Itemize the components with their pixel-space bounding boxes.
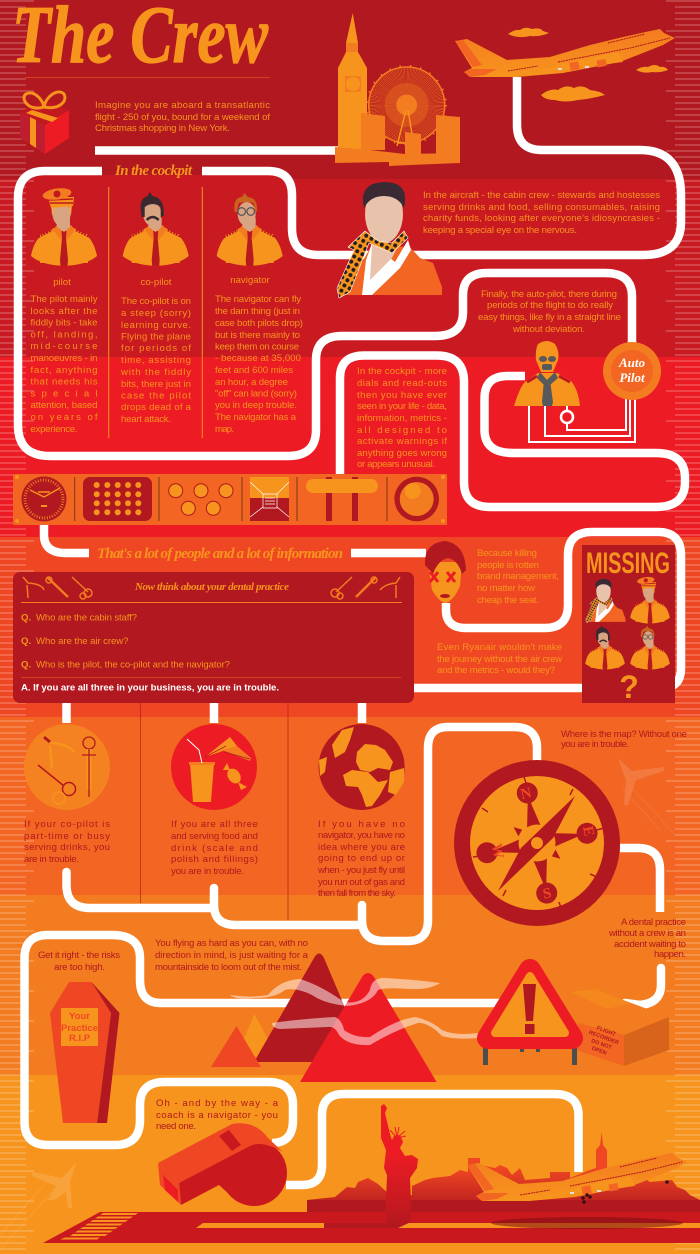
text: pilot: special (30, 388, 98, 399)
text: pilot: experience. (30, 424, 78, 435)
text: co-pilot: drops dead of a (121, 402, 192, 413)
icon: coffin: Practice (61, 1023, 98, 1034)
crew labels: pilot (53, 277, 71, 288)
text: co-pilot: case the pilot (121, 390, 191, 402)
badge: auto pilot (603, 342, 661, 400)
icon: food and drink circle (171, 724, 257, 810)
text: where is the map (561, 729, 687, 750)
icon: gift (20, 92, 69, 154)
round lamps (169, 484, 233, 515)
intro text: flight - 250 of you, bound for a weekend of (95, 112, 270, 123)
text: killing people: people is rotten (477, 560, 539, 571)
icon: compass (454, 760, 620, 926)
question 3: Who is the pilot, the co-pilot and the navigator? (36, 660, 230, 671)
heading: in the cockpit: In the cockpit (114, 163, 193, 179)
text: pilot: on years of (30, 412, 98, 423)
text: where is the map: you are in trouble. (561, 739, 629, 750)
ferris wheel (367, 66, 446, 146)
icon: compass: S (542, 885, 553, 903)
text: co-pilot: learning curve. (121, 320, 191, 331)
question 2: Q. (21, 636, 31, 647)
icon: compass: N (519, 785, 533, 803)
text: pilot: attention, based (30, 400, 98, 411)
text: accident waiting: A dental practice (621, 917, 686, 928)
dental tools right (331, 577, 400, 599)
text: navigator: an hour, a degree (215, 377, 288, 388)
text: navigator (215, 294, 303, 435)
text: pilot: mid-course (30, 341, 98, 352)
icon: coffin: R.I.P (69, 1033, 91, 1044)
text: cabin crew: keeping a special eye on the nervous. (423, 225, 577, 236)
crew labels: navigator (230, 275, 271, 286)
text: cockpit dials: anything goes wrong (357, 448, 447, 459)
icon: coffin (50, 982, 120, 1123)
question 2: Who are the air crew? (36, 636, 128, 647)
text: co-pilot: for periods of (121, 343, 191, 354)
text: navigator: The navigator can fly (215, 294, 301, 305)
text: cockpit dials: In the cockpit - more (357, 366, 447, 377)
intro text: Christmas shopping in New York. (95, 123, 230, 134)
landing gear (581, 1180, 669, 1204)
text: pilot: fiddly bits - take (30, 318, 98, 329)
circuit lines (529, 398, 635, 442)
mist (230, 978, 440, 1006)
icon: whistle (158, 1123, 287, 1206)
text: killing people: cheap the seat. (477, 595, 539, 606)
text: navigator: feet and 600 miles (215, 365, 293, 376)
text: no co-pilot: serving drinks, you (24, 842, 110, 853)
text: ryanair: the journey without the air crew (437, 654, 562, 665)
text: navigator: The navigator has a (215, 412, 297, 423)
text: no navigator: then fall from the sky. (318, 888, 396, 899)
text: cabin crew: In the aircraft - the cabin crew - stewards and hostesses (423, 190, 660, 201)
circuit node (561, 411, 573, 423)
question mark: ? (619, 669, 639, 705)
text: all three: and serving food and (171, 831, 258, 842)
runway (43, 1212, 700, 1243)
text: pilot: off, landing, (30, 329, 98, 340)
text: cockpit dials: seen in your life - data, (357, 401, 447, 412)
text: all three: drink (scale and (171, 843, 258, 854)
text: navigator: "off" can land (sorry) (215, 388, 297, 400)
missing pilot (630, 576, 670, 624)
text: flying hard: You flying as hard as you can, with no (155, 938, 308, 949)
text: navigator: you in deep trouble. (215, 400, 297, 411)
question 1: Who are the cabin staff? (36, 613, 137, 624)
text: all three: If you are all three (171, 819, 258, 830)
text: coach: coach is a navigator - you (156, 1110, 278, 1121)
text: cockpit dials: activate warnings if (357, 436, 447, 447)
icon: warning sign (483, 970, 577, 1065)
badge: auto pilot: Pilot (619, 370, 645, 385)
text: navigator: keep them on course (215, 342, 299, 352)
text: co-pilot (120, 296, 192, 425)
text: no navigator: idea where you are (318, 842, 405, 853)
icon: flight recorder box: DO NOT (590, 1038, 613, 1051)
crew labels: co-pilot (141, 277, 172, 288)
illustration: London skyline (335, 13, 460, 166)
text: no co-pilot: are in trouble. (24, 854, 79, 865)
text: coach: need one. (156, 1121, 196, 1132)
icon: dental tools circle (24, 724, 110, 810)
text: pilot (30, 294, 98, 435)
figure: auto-pilot dummy (514, 341, 580, 406)
text: cockpit dials (357, 366, 448, 470)
text: ryanair: and the metrics - would they? (437, 665, 555, 676)
text: flying hard: mountainside to loom out of the mist. (155, 962, 302, 973)
text: pilot: The pilot mainly (30, 294, 98, 305)
figure: co-pilot (123, 192, 189, 266)
icon: flight recorder box (565, 985, 669, 1066)
text: killing people: no matter how (477, 583, 535, 594)
column dividers (109, 187, 202, 438)
figure: cabin crew (337, 182, 442, 298)
text: cabin crew (423, 190, 660, 236)
text: auto-pilot: without deviation. (512, 324, 585, 335)
illustration: plane landing (467, 1153, 687, 1204)
gauge (22, 476, 66, 522)
text: cockpit dials: or appears unusual. (357, 459, 435, 470)
text: coach (156, 1098, 279, 1132)
text: get it right (38, 950, 120, 973)
question 3: Q. (21, 660, 31, 671)
text: all three: polish and fillings) (171, 854, 258, 865)
button grid (83, 477, 152, 521)
text: co-pilot: Flying the plane (121, 332, 191, 342)
round dial (394, 477, 439, 521)
text: coach: Oh - and by the way - a (156, 1098, 279, 1109)
text: no navigator: If you have no (318, 819, 405, 830)
text: cockpit dials: dials and read-outs (357, 378, 447, 389)
text: get it right: Get it right - the risks (38, 950, 120, 961)
badge: auto pilot: Auto (618, 355, 646, 370)
text: pilot: manoeuvres - in (30, 353, 98, 364)
figure: pilot (31, 187, 97, 266)
text: pilot: fact, anything (30, 365, 98, 376)
instrument panel (13, 474, 447, 525)
artificial horizon (250, 477, 289, 521)
figure: dead passenger face (425, 541, 466, 603)
text: cockpit dials: then you have ever (357, 390, 448, 401)
icon: compass: E (579, 825, 597, 838)
illustration: plane taking off (455, 29, 675, 77)
panel: missing poster (582, 545, 675, 705)
text: no navigator (317, 819, 406, 899)
text: no co-pilot: part-time or busy (24, 831, 110, 842)
text: cockpit dials: all designed to (357, 425, 447, 436)
text: pilot: looks after the (30, 306, 98, 317)
illustration: mountains (211, 954, 478, 1082)
icon: flight recorder box: FLIGHT (596, 1025, 617, 1038)
intro text (95, 100, 270, 134)
text: co-pilot: heart attack. (121, 414, 171, 425)
text: auto-pilot: Finally, the auto-pilot, there during (481, 289, 617, 300)
crew labels (53, 275, 271, 288)
text: navigator: case both pilots drop) (215, 318, 303, 329)
text: ryanair (437, 642, 562, 676)
text: all three (171, 819, 258, 877)
text: no navigator: you run out of gas and (318, 877, 405, 888)
watermark: plane lower left (0, 1163, 76, 1250)
missing co-pilot (585, 625, 625, 670)
box heading: Now think about your dental practice (134, 581, 289, 593)
text: killing people: brand management, (477, 571, 559, 582)
text: killing people: Because killing (477, 548, 537, 559)
text: no co-pilot: If your co-pilot is (24, 819, 110, 830)
text: co-pilot: with the fiddly (120, 367, 191, 378)
heading: a lot of information: That's a lot of people and a lot of information (97, 546, 343, 562)
text: no navigator: navigator, you have no (318, 830, 405, 841)
text: cabin crew: charity funds, looking after everyone's idiosyncrasies - (423, 213, 660, 224)
text: no co-pilot (24, 819, 110, 865)
intro text: Imagine you are aboard a transatlantic (95, 100, 270, 111)
big ben tower (338, 13, 367, 155)
text: accident waiting: happen. (654, 949, 686, 960)
text: ryanair: Even Ryanair wouldn't make (437, 642, 562, 653)
text: navigator: - because at 35,000 (215, 353, 301, 364)
text: get it right: are too high. (54, 962, 105, 973)
watermark: plane upper right (618, 758, 675, 835)
text: all three: you are in trouble. (171, 866, 244, 877)
text: no navigator: going to end up or (318, 853, 406, 864)
throttle levers (306, 477, 378, 521)
illustration: New York skyline (307, 1132, 700, 1212)
text: co-pilot: bits, there just in (121, 379, 191, 390)
icon: coffin: Your (69, 1011, 90, 1022)
question 1: Q. (21, 613, 31, 624)
missing cabin crew (586, 579, 626, 623)
text: accident waiting (608, 917, 686, 960)
text: navigator: map. (215, 424, 234, 435)
text: cabin crew: serving drinks and food, selling consumables, raising (423, 202, 660, 213)
text: flying hard: direction in mind, is just waiting for a (155, 950, 309, 961)
answer: A. If you are all three in your business, you are in trouble. (21, 683, 279, 694)
text: pilot: that needs his (30, 377, 98, 388)
text: co-pilot: The co-pilot is on (121, 296, 191, 307)
text: auto-pilot: easy things, like fly in a straight line (478, 312, 621, 323)
missing navigator (630, 626, 670, 670)
icon: flight recorder box: RECORDER (588, 1030, 620, 1046)
text: where is the map: Where is the map? Without one (561, 729, 687, 740)
text: navigator: the darn thing (just in (215, 306, 300, 317)
icon: globe (319, 724, 405, 810)
text: cockpit dials: information, metrics - (357, 413, 447, 424)
dental tools left (23, 577, 92, 599)
text: killing people (477, 548, 559, 606)
text: flying hard (155, 938, 309, 973)
text: accident waiting: accident waiting to (614, 939, 686, 950)
icon: compass: W (488, 842, 506, 860)
text: co-pilot: time, assisting (121, 355, 191, 366)
text: auto-pilot: periods of the flight to do really (487, 300, 613, 311)
clouds (508, 28, 668, 101)
text: auto-pilot (478, 289, 621, 335)
icon: flight recorder box: OPEN (591, 1046, 607, 1057)
title underline (25, 77, 270, 78)
text: accident waiting: without a crew is an (608, 928, 686, 939)
text: navigator: but is there mainly to (215, 330, 300, 341)
statue of liberty (324, 1104, 418, 1228)
text: co-pilot: a steep (sorry) (121, 308, 191, 319)
panel: dental practice questions (13, 572, 414, 703)
column rules (141, 703, 288, 920)
text: no navigator: when - you just fly until (317, 865, 405, 876)
figure: navigator (217, 193, 283, 266)
